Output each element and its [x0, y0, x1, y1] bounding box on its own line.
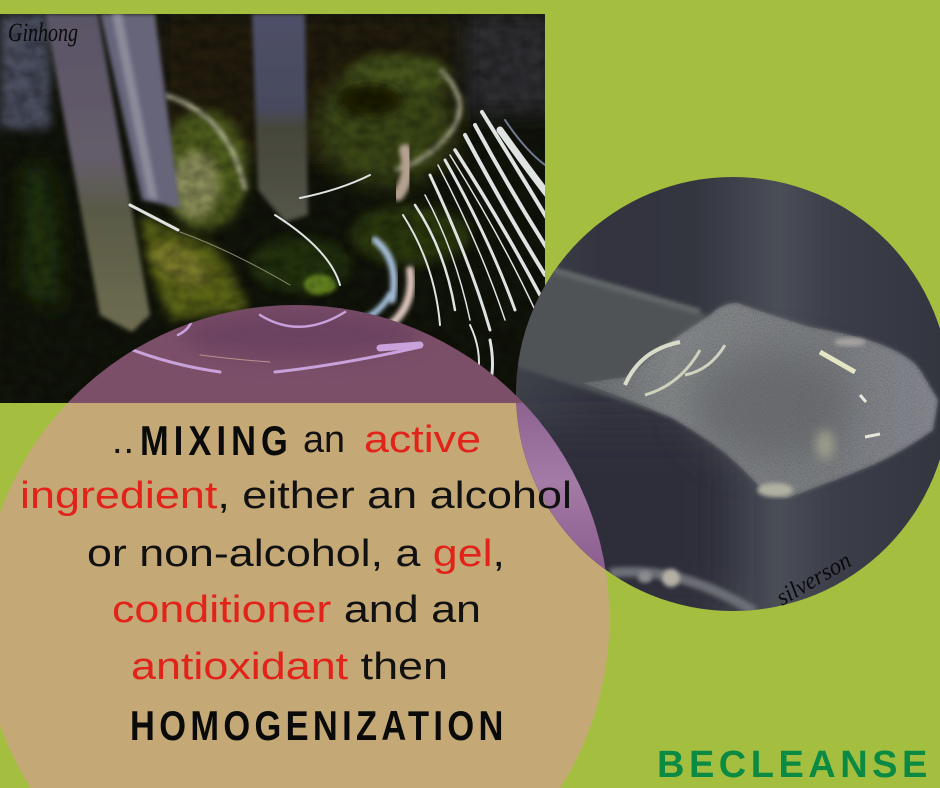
line 1: active	[364, 419, 481, 461]
gel circle photo	[505, 177, 940, 612]
rod 2	[100, 14, 180, 208]
line 2: ingredient , either an alcohol	[20, 475, 572, 517]
reflection at bottom of circle	[610, 572, 755, 612]
caption text	[20, 418, 572, 750]
line 6: HOMOGENIZATION	[130, 703, 508, 750]
line 5: antioxidant then	[131, 646, 448, 688]
gel blob	[583, 303, 938, 498]
line 3: or non-alcohol, a gel,	[87, 533, 505, 575]
rod 3	[252, 14, 308, 222]
tan circle panel	[0, 403, 610, 788]
line 4: conditioner and an	[112, 589, 481, 631]
line 1: ..	[112, 420, 134, 462]
signature: Ginhong: Ginhong	[8, 18, 78, 47]
line 1: MIXING	[140, 418, 293, 465]
line 1: an	[303, 419, 345, 461]
overlap: purple tint of tan circle over mixing photo	[68, 305, 524, 403]
overlap: purple lens of tan circle and gel circle	[516, 396, 606, 570]
photo: green gel being mixed	[0, 14, 555, 403]
swirl highlights	[130, 112, 548, 385]
signature: silverson: silverson	[772, 548, 856, 611]
line 1	[112, 418, 481, 465]
brand name: BECLEANSE	[657, 744, 932, 786]
rod 1	[45, 14, 150, 332]
